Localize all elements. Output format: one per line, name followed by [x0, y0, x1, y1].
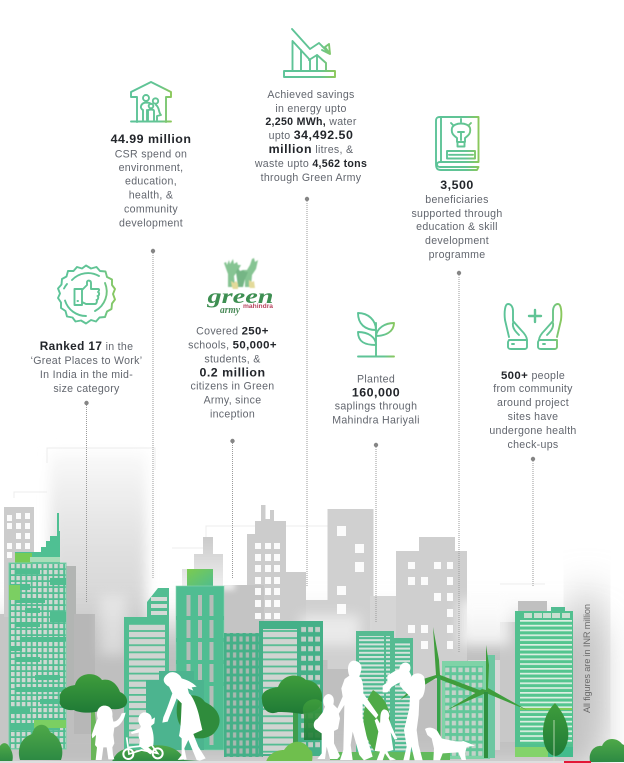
- text: savings description: upto 34,492.50: [269, 128, 353, 142]
- text: health description: around project: [497, 397, 569, 409]
- panel: saplings: [332, 313, 420, 426]
- dog: [425, 728, 475, 760]
- text: savings description: Achieved savings: [267, 89, 355, 101]
- child on bicycle: [123, 712, 163, 759]
- panel: Ranked 17: [31, 266, 142, 395]
- text: green army description: 0.2 million: [199, 366, 266, 380]
- green slotted building: [146, 569, 224, 750]
- text: saplings description: saplings through: [335, 400, 417, 412]
- ground line: [0, 761, 564, 763]
- boy with ball: [314, 694, 340, 759]
- girl standing: [92, 706, 126, 760]
- grey haze behind city: [0, 448, 600, 763]
- text: CSR description: health, &: [129, 190, 173, 202]
- text: ranked description: size category: [53, 383, 120, 395]
- text: ranked description: Ranked 17 in the: [40, 339, 133, 353]
- icon: falling chart: [284, 29, 335, 77]
- panel: savings: [254, 29, 367, 184]
- text: savings description: million litres, &: [269, 142, 353, 156]
- text: savings description: waste upto 4,562 tons: [254, 158, 367, 170]
- little girl: [375, 709, 397, 760]
- wind turbines: [400, 627, 527, 758]
- text: beneficiaries description: education & skill: [416, 221, 498, 233]
- icon: house with family: [131, 82, 171, 122]
- heading: 3,500: 3,500: [440, 178, 474, 192]
- icon: book with bulb: [436, 117, 478, 170]
- green grid building centre: [224, 621, 323, 757]
- soft white fade over grey buildings: [100, 540, 510, 655]
- text: saplings description: Planted: [357, 374, 395, 386]
- logo wordmark green: green: [206, 286, 274, 308]
- text: ranked description: ‘Great Places to Work’: [31, 355, 142, 367]
- text: CSR description: development: [119, 218, 183, 230]
- text: saplings description: 160,000: [352, 386, 400, 400]
- text: savings description: through Green Army: [261, 172, 362, 184]
- mother and baby: [383, 663, 425, 760]
- text: saplings description: Mahindra Hariyali: [332, 414, 420, 426]
- text: CSR description: [115, 148, 187, 230]
- tall striped green building right: [515, 601, 573, 757]
- text: health description: sites have: [508, 411, 558, 423]
- text: health description: 500+ people: [501, 370, 565, 382]
- text: CSR description: CSR spend on: [115, 148, 187, 160]
- icon: green army logo: [206, 258, 274, 316]
- vertical note: All figures are in INR million: [582, 604, 592, 713]
- logo wordmark mahindra: mahindra: [243, 304, 274, 310]
- grey building windows: [7, 513, 453, 649]
- text: savings description: in energy upto: [275, 103, 347, 115]
- text: green army description: Army, since: [204, 394, 261, 406]
- text: savings description: 2,250 MWh, water: [265, 116, 357, 128]
- icon: plant: [358, 313, 394, 356]
- text: green army description: Covered 250+: [196, 326, 269, 338]
- text: health description: [489, 370, 577, 451]
- red corner mark: [564, 761, 591, 763]
- text: green army description: citizens in Green: [190, 380, 274, 392]
- connector: savings: [305, 197, 309, 587]
- text: green army description: schools, 50,000+: [188, 340, 277, 352]
- connector: health: [531, 457, 535, 587]
- connector: green army: [230, 439, 235, 578]
- text: beneficiaries description: development: [425, 235, 489, 247]
- connector: CSR: [151, 249, 155, 578]
- text: beneficiaries description: beneficiaries: [425, 194, 489, 206]
- trees and bushes: [0, 674, 624, 762]
- text: beneficiaries description: [411, 194, 503, 261]
- text: CSR description: environment,: [119, 162, 183, 174]
- text: CSR description: community: [124, 204, 178, 216]
- grey buildings: [0, 505, 516, 763]
- text: CSR description: education,: [125, 176, 177, 188]
- panel: Green Army: [188, 258, 277, 420]
- panel: education beneficiaries: [411, 117, 503, 261]
- panel: CSR spend: [111, 82, 191, 230]
- text: beneficiaries description: supported through: [411, 208, 503, 220]
- icon: thumbs-up badge: [58, 266, 115, 324]
- text: health description: undergone health: [489, 425, 577, 437]
- woman bending: [162, 672, 206, 761]
- green tower left: [9, 513, 66, 749]
- text: beneficiaries description: programme: [429, 249, 485, 261]
- white silhouettes: mother and two children: [92, 672, 206, 761]
- logo wordmark army: army: [220, 305, 241, 316]
- heading: 44.99 million: 44.99 million: [111, 132, 191, 146]
- white silhouettes: family and dog: [314, 661, 475, 760]
- green stripe building: [124, 588, 169, 750]
- father: [336, 661, 378, 760]
- green building behind family: [356, 631, 413, 756]
- green building beside turbines: [442, 655, 495, 759]
- connector: ranked: [84, 401, 89, 603]
- text: green army description: students, &: [204, 354, 261, 366]
- text: ranked description: [31, 339, 142, 395]
- text: health description: check-ups: [508, 439, 558, 451]
- text: savings description: [254, 89, 367, 184]
- panel: health check-ups: [489, 304, 577, 451]
- text: green army description: inception: [210, 408, 255, 420]
- raised hands: [224, 258, 258, 289]
- text: ranked description: In India in the mid-: [40, 369, 133, 381]
- icon: caring hands with plus: [505, 304, 561, 349]
- connector: beneficiaries: [457, 271, 461, 653]
- text: saplings description: [332, 374, 420, 426]
- connector: saplings: [374, 443, 378, 623]
- city skyline illustration: [0, 448, 624, 763]
- text: health description: from community: [493, 383, 573, 395]
- text: green army description: [188, 326, 277, 420]
